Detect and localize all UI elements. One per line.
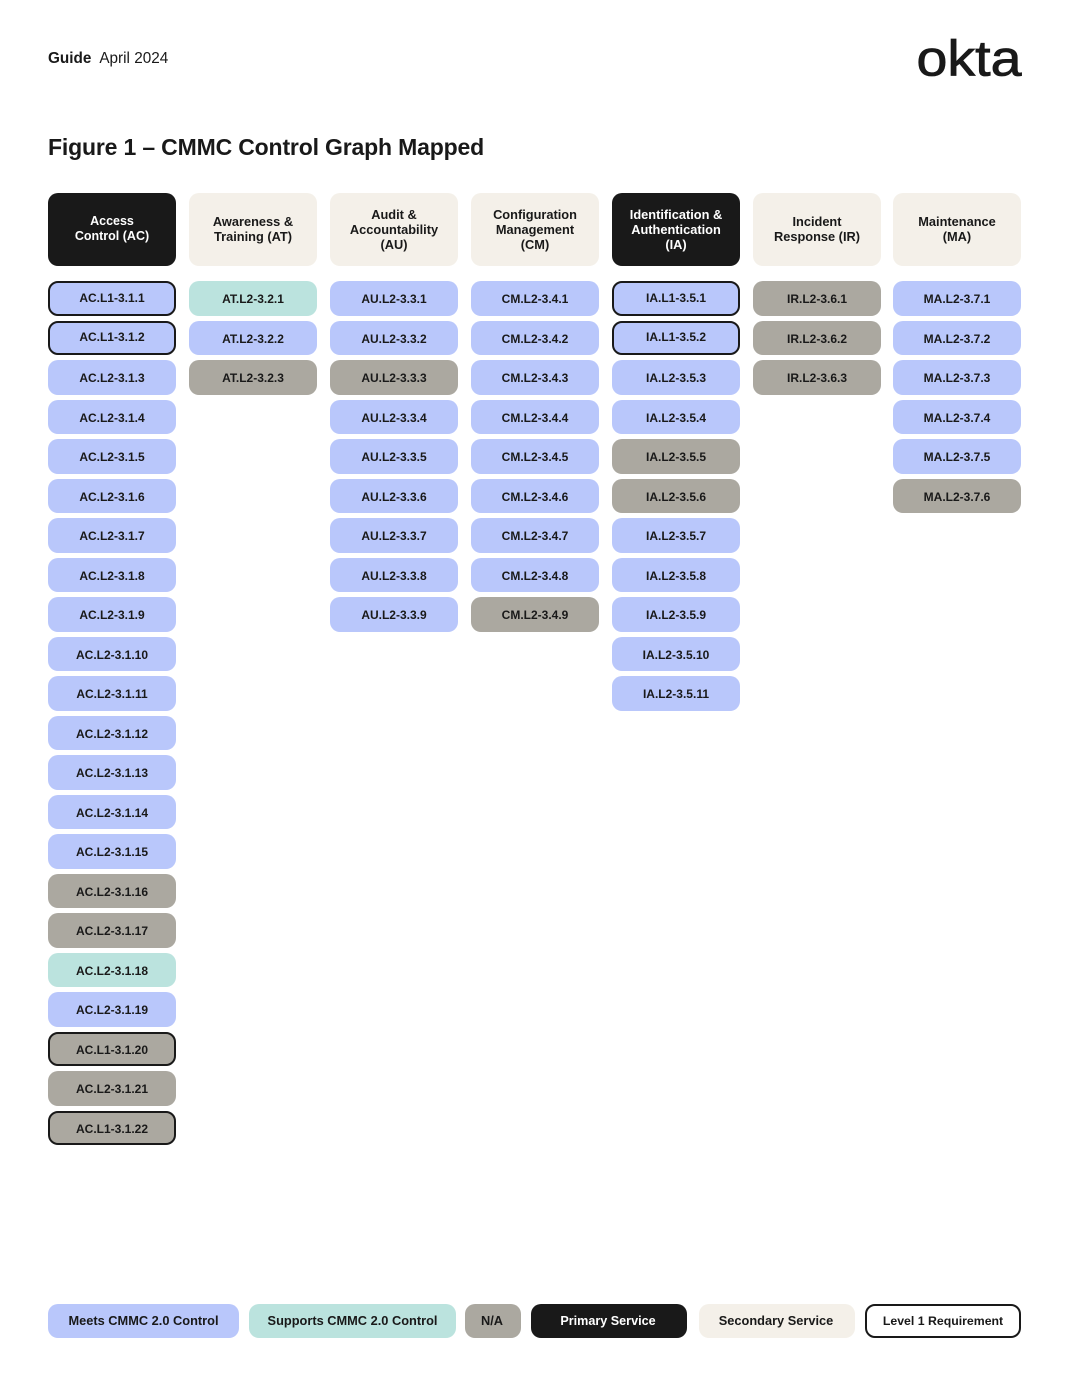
control IR.L2-3.6.2 — [753, 320, 881, 355]
control AC.L2-3.1.8 — [48, 558, 176, 592]
control MA.L2-3.7.3 — [893, 360, 1021, 394]
control MA.L2-3.7.1 — [893, 281, 1021, 316]
control AC.L2-3.1.10: AC.L2-3.1.10 — [76, 648, 148, 662]
header: Access Control — [48, 193, 176, 266]
header: Incident Response: Incident — [792, 214, 842, 228]
control AC.L1-3.1.20: AC.L1-3.1.20 — [76, 1042, 148, 1056]
control CM.L2-3.4.6 — [471, 478, 599, 513]
control AC.L2-3.1.9: AC.L2-3.1.9 — [79, 608, 145, 622]
header: Identification & Authentication: Identification & — [630, 207, 722, 222]
legend: Primary Service — [531, 1304, 687, 1338]
control MA.L2-3.7.6: MA.L2-3.7.6 — [924, 490, 990, 504]
control AC.L2-3.1.7 — [48, 518, 176, 552]
control AC.L2-3.1.6 — [48, 478, 176, 513]
control MA.L2-3.7.1: MA.L2-3.7.1 — [924, 292, 990, 306]
control AU.L2-3.3.7: AU.L2-3.3.7 — [361, 529, 427, 543]
control AC.L2-3.1.15: AC.L2-3.1.15 — [76, 845, 148, 859]
header: Configuration Management: Configuration — [493, 207, 577, 222]
control AC.L2-3.1.7: AC.L2-3.1.7 — [79, 529, 145, 543]
control AU.L2-3.3.2 — [330, 320, 458, 355]
control MA.L2-3.7.3: MA.L2-3.7.3 — [924, 371, 990, 385]
header: Incident Response — [753, 193, 881, 266]
control AU.L2-3.3.1 — [330, 281, 458, 316]
control MA.L2-3.7.5: MA.L2-3.7.5 — [924, 450, 990, 464]
header: Access Control: Access — [90, 214, 134, 228]
control IA.L2-3.5.11: IA.L2-3.5.11 — [643, 687, 709, 701]
legend — [48, 1304, 1021, 1338]
control IA.L1-3.5.1: IA.L1-3.5.1 — [646, 291, 706, 305]
column: Incident Response — [753, 193, 881, 395]
guide label and date: Guide April 2024 — [48, 50, 168, 67]
legend: Meets CMMC 2.0 Control: Meets CMMC 2.0 Control — [68, 1313, 219, 1328]
header: Identification & Authentication — [612, 193, 740, 266]
control IR.L2-3.6.3: IR.L2-3.6.3 — [787, 371, 847, 385]
control AU.L2-3.3.4: AU.L2-3.3.4 — [361, 410, 427, 424]
control IR.L2-3.6.3 — [753, 360, 881, 394]
control AU.L2-3.3.9 — [330, 597, 458, 632]
control AC.L2-3.1.17 — [48, 913, 176, 948]
control AU.L2-3.3.4 — [330, 400, 458, 434]
header: Audit & Accountability: Accountability — [350, 222, 438, 237]
title: Figure 1 – CMMC Control Graph Mapped — [48, 134, 484, 160]
control CM.L2-3.4.7: CM.L2-3.4.7 — [502, 529, 568, 543]
control AC.L2-3.1.18 — [48, 952, 176, 987]
control IA.L2-3.5.9: IA.L2-3.5.9 — [646, 608, 706, 622]
control AC.L2-3.1.19 — [48, 992, 176, 1026]
control AU.L2-3.3.8 — [330, 558, 458, 592]
legend: Level 1 Requirement — [865, 1304, 1021, 1338]
control IA.L1-3.5.2 — [612, 320, 740, 355]
control AT.L2-3.2.2 — [189, 320, 317, 355]
header: Identification & Authentication: Authentication — [631, 222, 721, 237]
control AU.L2-3.3.3: AU.L2-3.3.3 — [361, 371, 427, 385]
control AC.L2-3.1.18: AC.L2-3.1.18 — [76, 964, 148, 978]
control IA.L2-3.5.9 — [612, 597, 740, 632]
control MA.L2-3.7.2: MA.L2-3.7.2 — [924, 332, 990, 346]
header: Identification & Authentication: (IA) — [665, 237, 687, 252]
control IR.L2-3.6.1 — [753, 281, 881, 316]
control AC.L2-3.1.6: AC.L2-3.1.6 — [79, 490, 145, 504]
control AC.L2-3.1.16 — [48, 874, 176, 908]
control MA.L2-3.7.6 — [893, 478, 1021, 513]
control AC.L1-3.1.1 — [48, 281, 176, 316]
control IA.L2-3.5.3 — [612, 360, 740, 394]
control AC.L2-3.1.13: AC.L2-3.1.13 — [76, 766, 148, 780]
control AC.L2-3.1.10 — [48, 636, 176, 671]
control IA.L2-3.5.7: IA.L2-3.5.7 — [646, 529, 706, 543]
column: Audit & Accountability — [330, 193, 458, 632]
control AC.L2-3.1.5 — [48, 439, 176, 474]
control AU.L2-3.3.6 — [330, 478, 458, 513]
control AC.L2-3.1.17: AC.L2-3.1.17 — [76, 924, 148, 938]
legend: N/A: N/A — [481, 1313, 503, 1328]
control IR.L2-3.6.1: IR.L2-3.6.1 — [787, 292, 847, 306]
control IA.L2-3.5.8 — [612, 558, 740, 592]
control AC.L2-3.1.21: AC.L2-3.1.21 — [76, 1082, 148, 1096]
control AU.L2-3.3.5: AU.L2-3.3.5 — [361, 450, 427, 464]
control AT.L2-3.2.1 — [189, 281, 317, 316]
okta logo: okta — [916, 30, 1022, 85]
control CM.L2-3.4.5 — [471, 439, 599, 474]
header: Awareness & Training: Awareness & — [213, 214, 293, 228]
control IA.L2-3.5.5: IA.L2-3.5.5 — [646, 450, 706, 464]
control AC.L2-3.1.12: AC.L2-3.1.12 — [76, 726, 148, 740]
legend: N/A — [465, 1304, 521, 1338]
control IA.L2-3.5.6 — [612, 478, 740, 513]
control AU.L2-3.3.7 — [330, 518, 458, 552]
control CM.L2-3.4.4: CM.L2-3.4.4 — [502, 410, 568, 424]
control AC.L2-3.1.21 — [48, 1071, 176, 1106]
control AC.L2-3.1.4: AC.L2-3.1.4 — [79, 410, 145, 424]
header: Audit & Accountability: Audit & — [371, 207, 417, 222]
control AU.L2-3.3.5 — [330, 439, 458, 474]
control IA.L2-3.5.8: IA.L2-3.5.8 — [646, 568, 706, 582]
column: Access Control — [48, 193, 176, 1145]
column: Maintenance — [893, 193, 1021, 513]
control IA.L2-3.5.5 — [612, 439, 740, 474]
control IA.L2-3.5.3: IA.L2-3.5.3 — [646, 371, 706, 385]
control AC.L1-3.1.20 — [48, 1032, 176, 1066]
control AC.L2-3.1.19: AC.L2-3.1.19 — [76, 1003, 148, 1017]
control CM.L2-3.4.8: CM.L2-3.4.8 — [502, 568, 568, 582]
control CM.L2-3.4.2: CM.L2-3.4.2 — [502, 332, 568, 346]
control IA.L1-3.5.2: IA.L1-3.5.2 — [646, 330, 706, 344]
control AC.L2-3.1.11 — [48, 676, 176, 710]
control AC.L2-3.1.13 — [48, 755, 176, 790]
control AC.L2-3.1.11: AC.L2-3.1.11 — [76, 687, 148, 701]
legend: Supports CMMC 2.0 Control — [249, 1304, 456, 1338]
control IA.L2-3.5.4: IA.L2-3.5.4 — [646, 410, 706, 424]
control CM.L2-3.4.9: CM.L2-3.4.9 — [502, 608, 568, 622]
control AC.L1-3.1.2 — [48, 320, 176, 355]
header: Configuration Management: Management — [496, 222, 574, 237]
control MA.L2-3.7.4 — [893, 400, 1021, 434]
control AC.L2-3.1.3: AC.L2-3.1.3 — [79, 371, 145, 385]
control AU.L2-3.3.1: AU.L2-3.3.1 — [361, 292, 427, 306]
control IA.L2-3.5.6: IA.L2-3.5.6 — [646, 490, 706, 504]
control AC.L2-3.1.14 — [48, 794, 176, 829]
control CM.L2-3.4.8 — [471, 558, 599, 592]
control IA.L2-3.5.4 — [612, 400, 740, 434]
control AC.L2-3.1.8: AC.L2-3.1.8 — [79, 568, 145, 582]
control AC.L2-3.1.4 — [48, 400, 176, 434]
control CM.L2-3.4.1 — [471, 281, 599, 316]
legend: Meets CMMC 2.0 Control — [48, 1304, 239, 1338]
control AC.L1-3.1.1: AC.L1-3.1.1 — [79, 291, 145, 305]
control CM.L2-3.4.7 — [471, 518, 599, 552]
control AC.L1-3.1.22: AC.L1-3.1.22 — [76, 1122, 148, 1136]
legend: Primary Service: Primary Service — [560, 1314, 656, 1328]
header: Awareness & Training — [189, 193, 317, 266]
header: Incident Response: Response (IR) — [774, 228, 860, 244]
header: Maintenance: (MA) — [943, 228, 971, 244]
control CM.L2-3.4.6: CM.L2-3.4.6 — [502, 490, 568, 504]
legend: Secondary Service — [699, 1304, 855, 1338]
control AT.L2-3.2.2: AT.L2-3.2.2 — [222, 332, 284, 346]
control MA.L2-3.7.2 — [893, 320, 1021, 355]
header: Audit & Accountability: (AU) — [380, 237, 408, 252]
control IA.L2-3.5.10: IA.L2-3.5.10 — [643, 648, 709, 662]
control IA.L2-3.5.10 — [612, 636, 740, 671]
legend: Supports CMMC 2.0 Control: Supports CMMC 2.0 Control — [268, 1313, 437, 1328]
control IA.L1-3.5.1 — [612, 281, 740, 316]
control AC.L2-3.1.12 — [48, 716, 176, 750]
control AU.L2-3.3.8: AU.L2-3.3.8 — [361, 568, 427, 582]
header: Configuration Management: (CM) — [521, 237, 549, 252]
control AC.L1-3.1.2: AC.L1-3.1.2 — [79, 330, 145, 344]
column: Configuration Management — [471, 193, 599, 632]
column: Awareness & Training — [189, 193, 317, 395]
header: Maintenance — [893, 193, 1021, 266]
header: Maintenance: Maintenance — [918, 214, 996, 228]
control MA.L2-3.7.5 — [893, 439, 1021, 474]
control MA.L2-3.7.4: MA.L2-3.7.4 — [924, 410, 990, 424]
legend: Level 1 Requirement: Level 1 Requirement — [883, 1314, 1003, 1328]
control AT.L2-3.2.1: AT.L2-3.2.1 — [222, 292, 284, 306]
header: Awareness & Training: Training (AT) — [214, 228, 292, 244]
control AU.L2-3.3.3 — [330, 360, 458, 394]
control AC.L2-3.1.9 — [48, 597, 176, 632]
control IA.L2-3.5.7 — [612, 518, 740, 552]
control AU.L2-3.3.6: AU.L2-3.3.6 — [361, 490, 427, 504]
control AC.L2-3.1.5: AC.L2-3.1.5 — [79, 450, 145, 464]
control AT.L2-3.2.3: AT.L2-3.2.3 — [222, 371, 284, 385]
legend: Secondary Service: Secondary Service — [719, 1313, 833, 1328]
control IA.L2-3.5.11 — [612, 676, 740, 710]
control CM.L2-3.4.4 — [471, 400, 599, 434]
control CM.L2-3.4.3: CM.L2-3.4.3 — [502, 371, 568, 385]
control AC.L2-3.1.16: AC.L2-3.1.16 — [76, 884, 148, 898]
control AC.L2-3.1.14: AC.L2-3.1.14 — [76, 806, 148, 820]
control AU.L2-3.3.9: AU.L2-3.3.9 — [361, 608, 427, 622]
control AC.L2-3.1.15 — [48, 834, 176, 868]
control AT.L2-3.2.3 — [189, 360, 317, 394]
control AU.L2-3.3.2: AU.L2-3.3.2 — [361, 332, 427, 346]
header: Access Control: Control (AC) — [75, 228, 149, 242]
header: Configuration Management — [471, 193, 599, 266]
control CM.L2-3.4.5: CM.L2-3.4.5 — [502, 450, 568, 464]
control CM.L2-3.4.3 — [471, 360, 599, 394]
control CM.L2-3.4.1: CM.L2-3.4.1 — [502, 292, 568, 306]
control IR.L2-3.6.2: IR.L2-3.6.2 — [787, 332, 847, 346]
header: Audit & Accountability — [330, 193, 458, 266]
column: Identification & Authentication — [612, 193, 740, 711]
control AC.L1-3.1.22 — [48, 1110, 176, 1145]
control CM.L2-3.4.9 — [471, 597, 599, 632]
control AC.L2-3.1.3 — [48, 360, 176, 394]
control CM.L2-3.4.2 — [471, 320, 599, 355]
